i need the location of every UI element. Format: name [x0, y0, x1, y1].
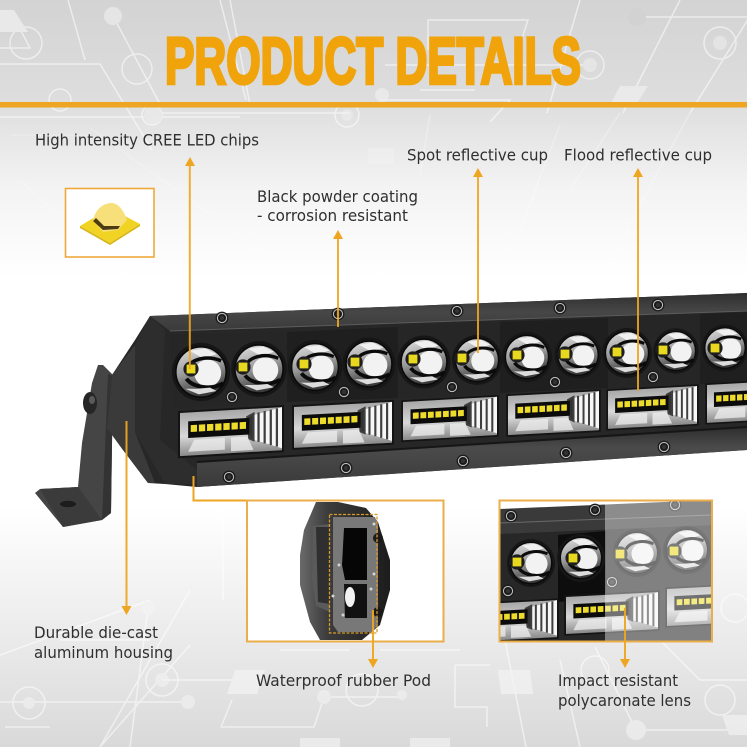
label: waterproof rubber pod: Waterproof rubber Pod — [256, 671, 431, 690]
label: Black powder coating — [257, 187, 418, 225]
arrow: black powder coating — [333, 230, 343, 327]
label: impact resistant polycaronate lens — [558, 671, 691, 710]
spot lenses — [172, 325, 747, 401]
title underline — [0, 102, 747, 108]
connector line to pod inset — [194, 476, 247, 500]
light bar housing — [107, 293, 747, 487]
zoomed light bar comparison — [500, 502, 711, 640]
panel: waterproof rubber pod inset — [247, 500, 444, 642]
label: impact resistant polycaronate lens: polycaronate lens — [558, 691, 691, 710]
housing screws — [216, 299, 670, 483]
label: Spot reflective cup: Spot reflective cup — [407, 146, 548, 164]
flood reflector modules — [178, 378, 747, 458]
label: durable die-cast aluminum housing: Durable die-cast — [34, 623, 158, 642]
yellow LED chips — [183, 340, 723, 377]
label: Flood reflective cup: Flood reflective cup — [564, 146, 712, 164]
label: durable die-cast aluminum housing: aluminum housing — [34, 643, 173, 662]
label: impact resistant polycaronate lens: Impact resistant — [558, 671, 678, 690]
panel: polycarbonate lens inset — [498, 500, 713, 642]
label: durable die-cast aluminum housing — [34, 623, 173, 662]
arrow: CREE LED chips — [185, 157, 195, 369]
label: Black powder coating: - corrosion resistant — [257, 206, 408, 225]
arrow: die-cast housing — [122, 421, 132, 615]
arrow: impact resistant lens — [620, 608, 630, 668]
arrow: spot reflective cup — [473, 168, 483, 353]
arrow: waterproof rubber pod — [368, 610, 378, 668]
icon: yellow LED chip — [80, 203, 140, 245]
mounting bracket — [35, 365, 113, 527]
arrow: flood reflective cup — [633, 168, 643, 391]
panel: LED chip inset — [66, 188, 154, 257]
label: High intensity CREE LED chips: High intensity CREE LED chips — [35, 130, 259, 150]
label: Black powder coating: Black powder coating — [257, 187, 418, 206]
rubber pod illustration — [300, 502, 390, 640]
